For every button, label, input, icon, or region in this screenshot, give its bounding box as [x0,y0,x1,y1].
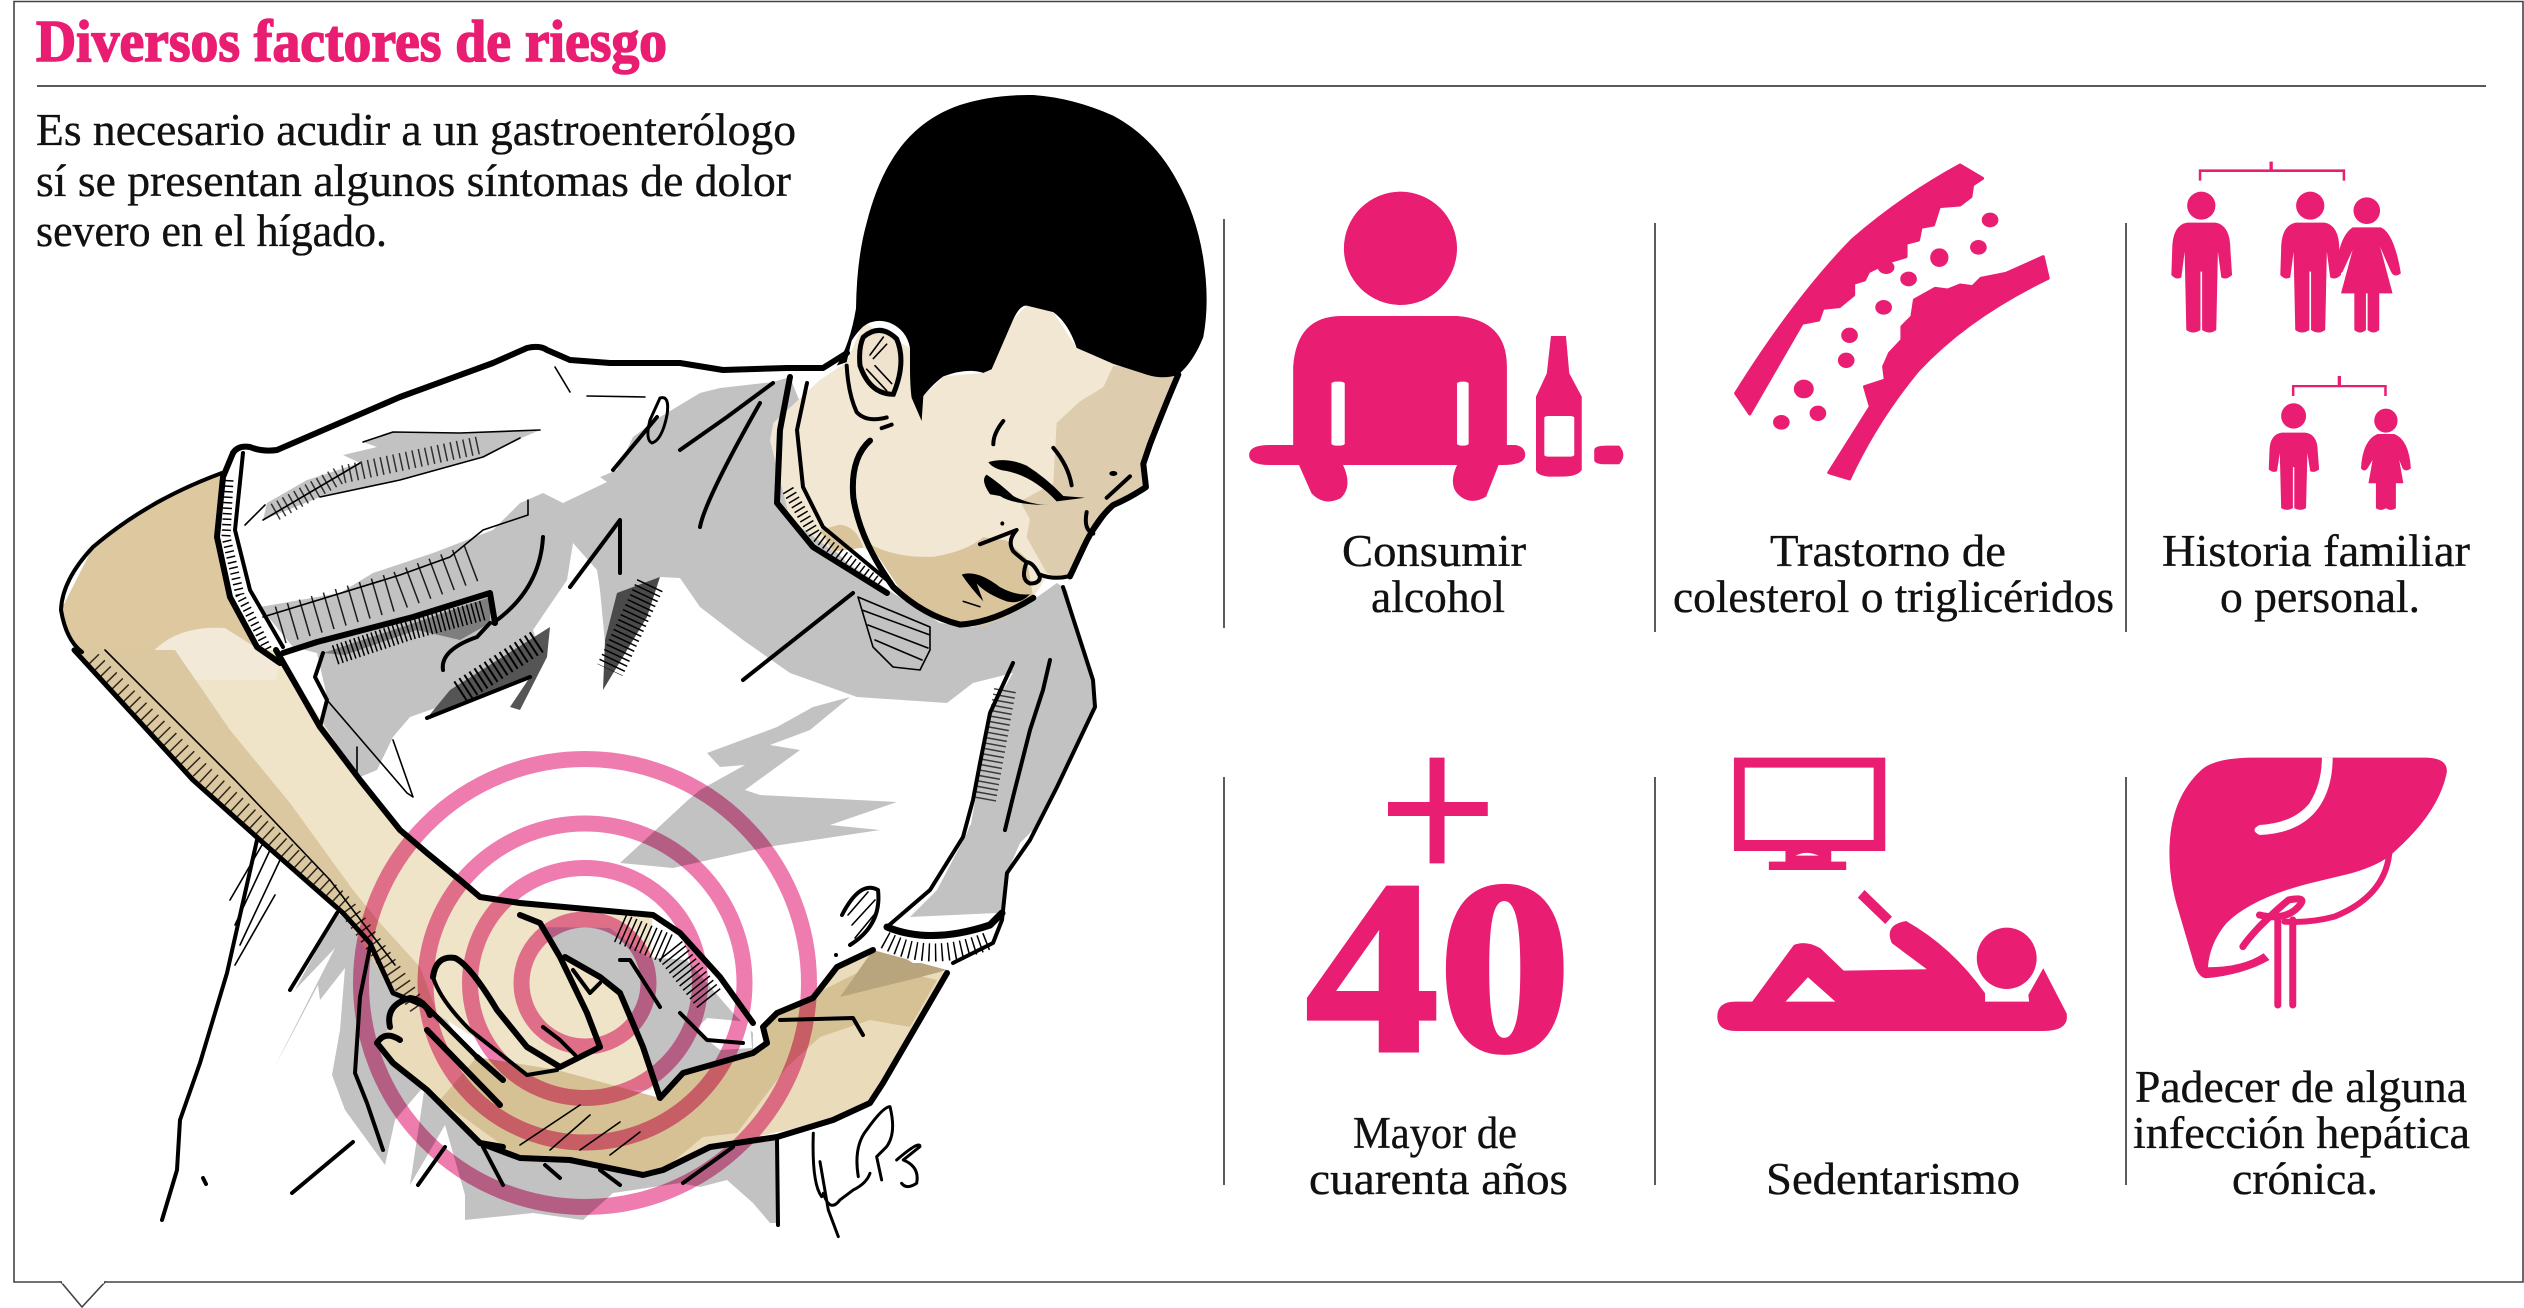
icon: person with bottle [1249,192,1623,502]
icon: artery with plaque [1736,165,2048,479]
icon: plus sign [1388,758,1488,863]
signature mark [813,1107,920,1237]
label: consumir alcohol: Consumir [1342,526,1526,576]
hand and body linework [162,840,947,1225]
big number 40: 40 [1306,832,1571,1104]
head [770,95,1207,626]
panel: bottom row icons [1388,758,2447,1031]
label: mayor de cuarenta años [1309,1108,1568,1204]
label: sedentarismo: Sedentarismo [1766,1154,2020,1204]
forearm hatching and outline [74,650,753,1057]
icon: television and reclining person [1717,758,2067,1031]
icon: liver [2169,758,2447,1005]
elbow outline [61,473,222,652]
icon: family [2171,162,2411,510]
illustration: man holding his abdomen [61,95,1207,1237]
intro text: sí se presentan algunos síntomas de dolor [36,156,791,206]
label: consumir alcohol [1342,526,1526,622]
panel: top row icons [1249,162,2411,510]
intro text [36,105,796,256]
pain rings [361,759,809,1207]
label: mayor de cuarenta años: cuarenta años [1309,1154,1568,1204]
label: infección hepática: Padecer de alguna [2135,1062,2467,1112]
skin: arms [61,470,1002,1175]
dividers [1224,219,2126,1185]
label: infección hepática: infección hepática [2133,1108,2470,1158]
intro text: severo en el hígado. [36,206,387,256]
shirt linework [217,347,1095,963]
label: colesterol [1673,526,2114,622]
label: infección hepática: crónica. [2232,1154,2378,1204]
label: historia familiar: Historia familiar [2162,526,2470,576]
label: consumir alcohol: alcohol [1371,572,1505,622]
label: infección hepática [2133,1062,2470,1204]
intro text: Es necesario acudir a un gastroenterólogo [36,105,796,155]
label: historia familiar: o personal. [2220,572,2420,622]
shirt shadows [260,377,1093,1223]
label: historia familiar [2162,526,2470,622]
label: colesterol: colesterol o triglicéridos [1673,572,2114,622]
label: mayor de cuarenta años: Mayor de [1353,1108,1517,1158]
label: colesterol: Trastorno de [1770,526,2006,576]
title: Diversos factores de riesgo [36,8,667,74]
